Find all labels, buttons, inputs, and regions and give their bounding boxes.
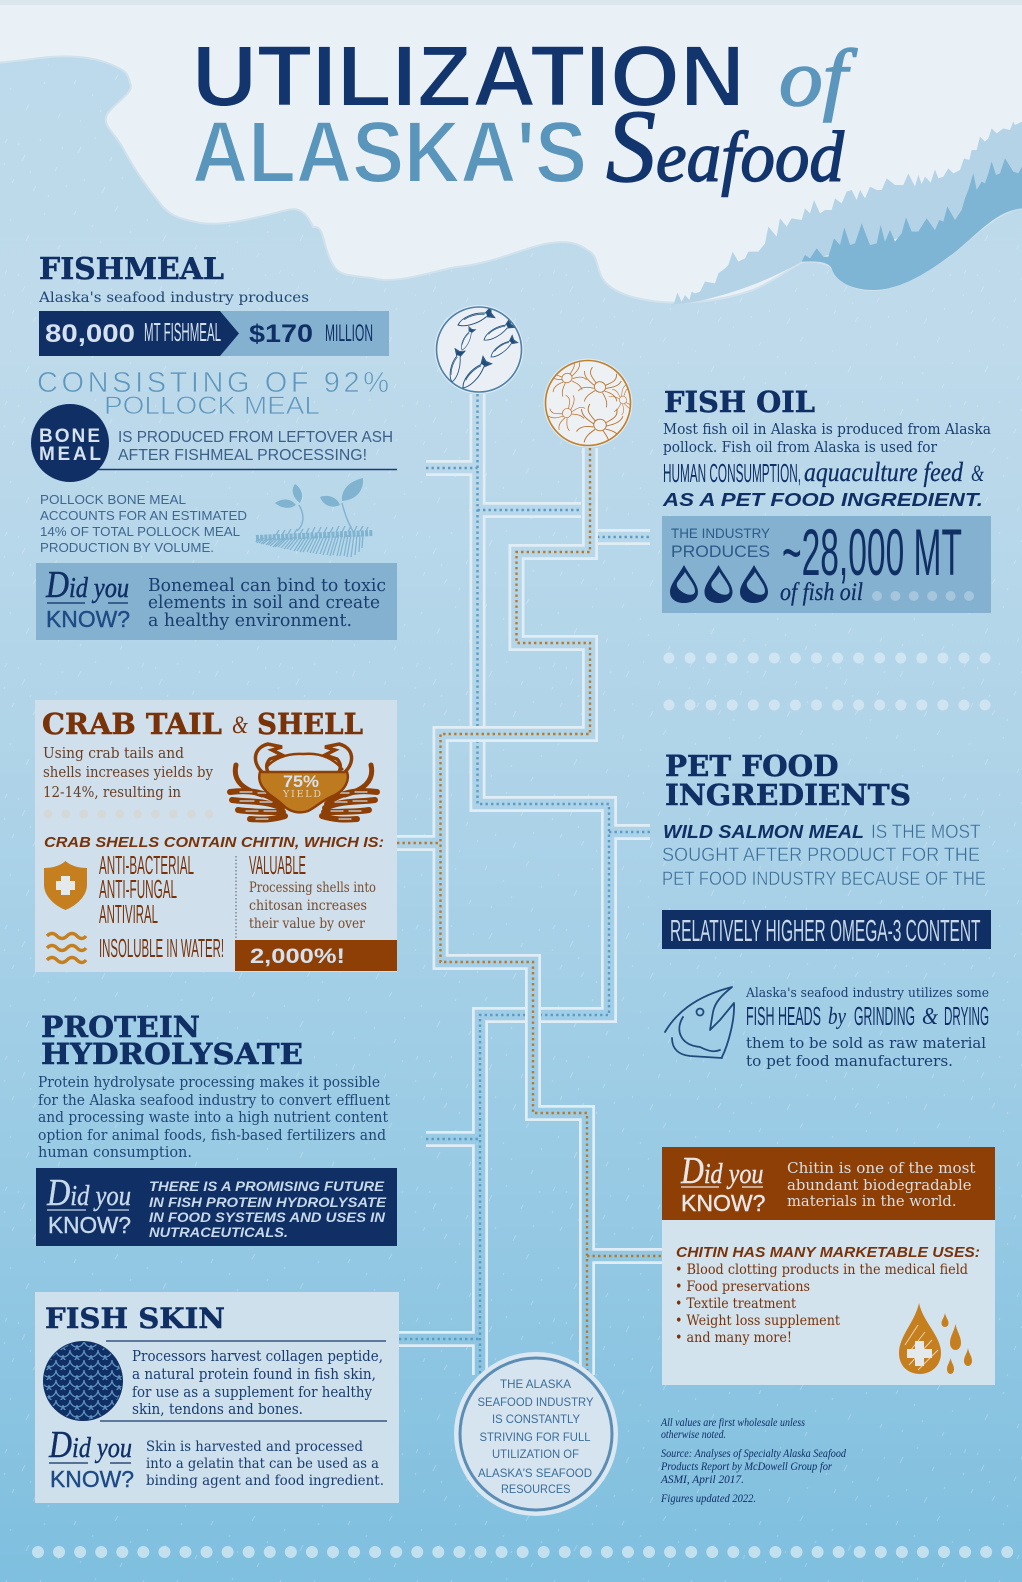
snow and forested hillside header <box>0 0 1022 304</box>
heading: protein hydrolysate <box>41 1010 303 1071</box>
heading: crab tail & shell <box>42 707 363 741</box>
pollock bone meal text: 14% OF TOTAL POLLOCK MEAL <box>40 525 240 539</box>
stat bar <box>39 311 389 356</box>
pet food body: WILD SALMON MEAL <box>663 822 864 842</box>
fish heads text <box>745 986 989 1070</box>
fish oil uses: aquaculture feed <box>804 457 963 487</box>
footnotes: Products Report by McDowell Group for <box>660 1459 832 1473</box>
callout: closing circle: ALASKA'S SEAFOOD <box>478 1466 592 1480</box>
did you know: fish skin: Skin is harvested and processed <box>146 1439 363 1455</box>
chitin uses list: • Textile treatment <box>675 1296 797 1312</box>
icon: plants growing from fish bone <box>256 478 373 557</box>
dots <box>48 810 210 818</box>
icon: crab 75% yield <box>230 744 377 820</box>
valuable column: VALUABLE <box>249 850 306 880</box>
fish heads text: Alaska's seafood industry utilizes some <box>745 986 989 1001</box>
panel: protein hydrolysate <box>36 1010 397 1246</box>
fish heads text: FISH HEADS <box>746 1001 821 1031</box>
icon: fish scales circle <box>43 1341 123 1421</box>
heading: pet food ingredients <box>665 749 911 812</box>
valuable column: chitosan increases <box>249 898 367 914</box>
heading: pet food ingredients: PET FOOD <box>665 749 838 783</box>
intro text: Alaska's seafood industry produces <box>38 290 309 306</box>
collagen text <box>132 1349 383 1418</box>
callout: closing circle: IS CONSTANTLY <box>492 1412 580 1426</box>
did you know: protein <box>36 1168 397 1246</box>
did you know: fish skin: Did you <box>48 1424 132 1466</box>
callout: closing circle <box>454 1352 618 1516</box>
pet food body: PET FOOD INDUSTRY BECAUSE OF THE <box>662 869 986 890</box>
bone meal text: IS PRODUCED FROM LEFTOVER ASH <box>118 429 393 446</box>
collagen text: for use as a supplement for healthy <box>132 1385 373 1401</box>
did you know: chitin: materials in the world. <box>787 1192 956 1210</box>
fish heads text: to pet food manufacturers. <box>746 1054 953 1070</box>
title <box>192 28 858 204</box>
did you know: protein: IN FISH PROTEIN HYDROLYSATE <box>149 1195 387 1210</box>
icon: salmon circle <box>434 305 524 394</box>
footnotes: Figures updated 2022. <box>660 1491 756 1505</box>
pollock bone meal text <box>40 493 247 555</box>
dotted footer <box>38 1546 1010 1558</box>
heading: fish skin: FISH SKIN <box>45 1302 225 1335</box>
dotted dividers <box>669 658 986 705</box>
did you know: protein: THERE IS A PROMISING FUTURE <box>149 1179 385 1194</box>
did you know: bonemeal: Did you <box>45 564 129 606</box>
panel: fish oil <box>662 385 991 613</box>
icon: crab 75% yield: 75% <box>283 772 319 791</box>
bone meal badge: BONE <box>39 426 100 447</box>
panel: crab tail and shell: INSOLUBLE IN WATER! <box>99 933 224 963</box>
valuable column: Processing shells into <box>249 880 376 896</box>
chitin properties <box>99 850 224 963</box>
pet food body: IS THE MOST <box>871 822 981 843</box>
chitin uses list: • Food preservations <box>675 1279 810 1295</box>
stat box: fish oil: PRODUCES <box>671 542 770 561</box>
did you know: bonemeal: KNOW? <box>46 606 130 632</box>
callout: closing circle: THE ALASKA <box>500 1377 571 1391</box>
footnotes: Source: Analyses of Specialty Alaska Seafood <box>661 1446 847 1460</box>
pet food body: SOUGHT AFTER PRODUCT FOR THE <box>662 845 980 866</box>
bone meal text: AFTER FISHMEAL PROCESSING! <box>118 447 367 464</box>
fish oil body: Most fish oil in Alaska is produced from Alaska <box>663 422 991 438</box>
fish heads text: & <box>922 1004 938 1030</box>
pollock bone meal text: ACCOUNTS FOR AN ESTIMATED <box>40 509 247 523</box>
did you know: protein: KNOW? <box>48 1212 131 1238</box>
collagen text: skin, tendons and bones. <box>132 1402 303 1418</box>
did you know: chitin: Did you <box>680 1150 764 1192</box>
pollock bone meal text: PRODUCTION BY VOLUME. <box>40 541 214 555</box>
heading: pet food ingredients: INGREDIENTS <box>665 778 911 812</box>
footnotes: ASMI, April 2017. <box>660 1472 744 1486</box>
stat bar: MT FISHMEAL <box>144 317 221 347</box>
fish oil uses: HUMAN CONSUMPTION, <box>663 458 801 488</box>
icon: fish head <box>665 987 734 1058</box>
callout: closing circle: UTILIZATION OF <box>492 1447 579 1461</box>
fish heads text: GRINDING <box>854 1001 915 1031</box>
panel: crab tail and shell <box>35 700 397 972</box>
pollock bone meal text: POLLOCK BONE MEAL <box>40 493 186 507</box>
crab yield text <box>43 746 214 801</box>
collagen text: a natural protein found in fish skin, <box>132 1367 376 1383</box>
callout: closing circle: SEAFOOD INDUSTRY <box>478 1395 594 1409</box>
orange pipeline <box>397 448 662 1375</box>
protein body: Protein hydrolysate processing makes it possible <box>38 1075 380 1091</box>
heading: crab tail & shell: & <box>232 712 248 739</box>
did you know: fish skin: binding agent and food ingredient. <box>146 1473 384 1489</box>
did you know: fish skin: into a gelatin that can be used as a <box>146 1456 379 1472</box>
2,000% bar <box>235 940 397 971</box>
pet food body <box>662 822 986 890</box>
callout: closing circle: RESOURCES <box>501 1482 570 1496</box>
crab yield text: 12-14%, resulting in <box>43 785 181 801</box>
callout: closing circle: STRIVING FOR FULL <box>480 1430 591 1444</box>
protein body: for the Alaska seafood industry to convert effluent <box>38 1093 390 1109</box>
fish oil uses: & <box>971 461 984 486</box>
did you know: fish skin <box>48 1424 384 1492</box>
crab yield text: Using crab tails and <box>43 746 184 762</box>
fish oil uses: AS A PET FOOD INGREDIENT. <box>662 490 983 510</box>
chitin properties: ANTI-FUNGAL <box>99 874 177 904</box>
chitin uses list: • and many more! <box>675 1330 792 1346</box>
stat box: fish oil <box>662 515 991 613</box>
heading: protein hydrolysate: HYDROLYSATE <box>41 1037 303 1071</box>
2,000% bar: 2,000%! <box>250 945 345 968</box>
stat bar: $170 <box>249 320 313 348</box>
stat bar: 80,000 <box>45 320 135 348</box>
bone meal badge: MEAL <box>39 444 101 465</box>
icon: crab circle <box>544 358 639 448</box>
icon: three oil drops <box>670 565 768 603</box>
crab yield text: shells increases yields by <box>43 765 214 781</box>
stat bar: MILLION <box>325 320 373 347</box>
panel: fishmeal <box>31 252 397 640</box>
pipelines <box>397 394 662 1375</box>
stat box: fish oil: THE INDUSTRY <box>671 525 771 541</box>
protein body: option for animal foods, fish-based fertilizers and <box>38 1128 386 1144</box>
pollock statement <box>37 367 389 420</box>
protein body: and processing waste into a high nutrient content <box>38 1110 388 1126</box>
footnotes <box>660 1415 847 1505</box>
did you know: bonemeal: elements in soil and create <box>148 592 380 613</box>
icon: medical drops <box>899 1303 972 1374</box>
valuable column <box>249 850 376 932</box>
icon: water waves <box>47 934 86 962</box>
title: Seafood <box>606 89 845 204</box>
fish oil body <box>663 422 991 456</box>
panel: fish skin <box>35 1292 399 1503</box>
did you know: protein: IN FOOD SYSTEMS AND USES IN <box>149 1210 385 1225</box>
did you know: fish skin: KNOW? <box>50 1466 134 1492</box>
title: ALASKA'S <box>192 104 587 201</box>
heading: crab tail & shell: CRAB TAIL <box>42 707 222 741</box>
heading: protein hydrolysate: PROTEIN <box>41 1010 200 1044</box>
valuable column: their value by over <box>249 916 365 932</box>
title: of <box>779 35 858 123</box>
heading: fish oil: FISH OIL <box>664 385 815 419</box>
fish oil uses <box>662 457 984 510</box>
did you know: protein: NUTRACEUTICALS. <box>149 1225 288 1240</box>
icon: crab 75% yield: YIELD <box>282 789 321 800</box>
heading: crab tail & shell: SHELL <box>257 707 363 741</box>
did you know: bonemeal: a healthy environment. <box>148 610 352 631</box>
did you know: chitin: Chitin is one of the most <box>787 1159 976 1177</box>
fish heads text: them to be sold as raw material <box>746 1036 986 1052</box>
did you know: bonemeal: Bonemeal can bind to toxic <box>148 575 386 596</box>
chitin uses heading: CHITIN HAS MANY MARKETABLE USES: <box>676 1245 980 1261</box>
fish heads text: by <box>828 1004 846 1030</box>
protein body: human consumption. <box>38 1145 192 1161</box>
pollock statement: POLLOCK MEAL <box>104 392 320 420</box>
did you know: chitin: abundant biodegradable <box>787 1176 972 1194</box>
bone meal text <box>118 429 393 464</box>
did you know: protein: Did you <box>46 1172 131 1214</box>
chitin properties: ANTIVIRAL <box>99 899 158 929</box>
pollock statement: CONSISTING OF 92% <box>37 367 389 399</box>
footnotes: All values are first wholesale unless <box>660 1415 805 1429</box>
chitin uses list: • Blood clotting products in the medical field <box>675 1262 968 1278</box>
collagen text: Processors harvest collagen peptide, <box>132 1349 383 1365</box>
fish oil body: pollock. Fish oil from Alaska is used for <box>663 440 937 456</box>
chitin heading: CRAB SHELLS CONTAIN CHITIN, WHICH IS: <box>44 834 384 851</box>
chitin uses list <box>675 1262 968 1346</box>
stat box: fish oil: of fish oil <box>780 579 863 606</box>
icon: shield <box>44 861 87 910</box>
chitin uses list: • Weight loss supplement <box>675 1313 841 1329</box>
did you know: chitin <box>662 1147 995 1220</box>
title: UTILIZATION <box>192 28 745 125</box>
chitin properties: ANTI-BACTERIAL <box>99 850 194 880</box>
blue pipeline <box>399 394 650 1375</box>
did you know: bonemeal <box>36 563 397 640</box>
footnotes: otherwise noted. <box>661 1427 726 1441</box>
did you know: chitin: KNOW? <box>681 1190 766 1216</box>
heading: fishmeal: FISHMEAL <box>39 252 224 287</box>
panel: pet food ingredients <box>662 749 991 1070</box>
panel: chitin <box>662 1147 995 1385</box>
bone meal badge <box>31 404 397 482</box>
protein body <box>38 1075 390 1161</box>
